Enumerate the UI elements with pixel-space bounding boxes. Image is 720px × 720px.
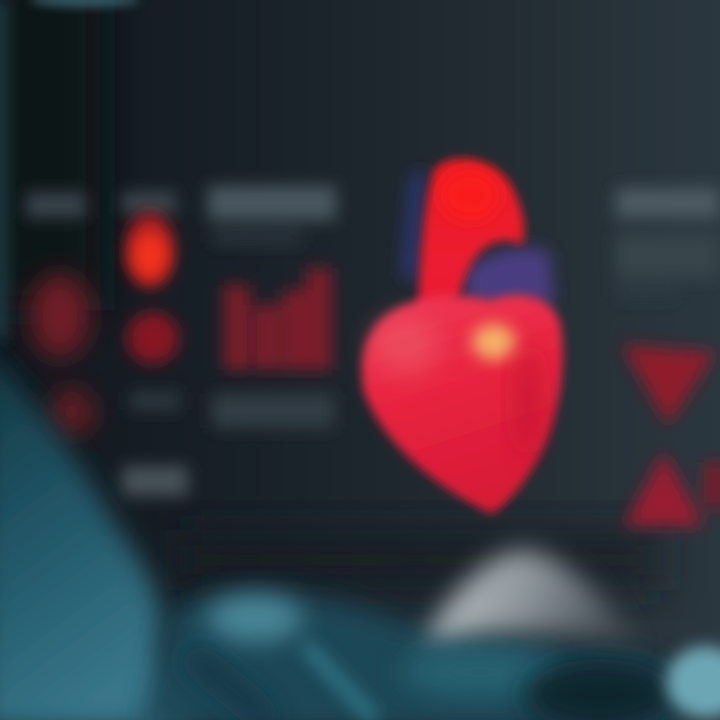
illustration: anatomical heart <box>362 159 563 514</box>
heart body <box>362 295 563 514</box>
text block: lower left labels <box>122 392 334 496</box>
aorta <box>418 159 524 325</box>
foreground: teal figure shoulder <box>0 345 680 720</box>
panel: left column headings <box>26 186 336 244</box>
icon: right red triangles <box>622 345 720 526</box>
icon: left red markers <box>30 274 94 436</box>
vessels: purple veins <box>400 170 554 306</box>
shade right <box>514 345 542 455</box>
glow centre <box>472 324 516 360</box>
highlight aorta <box>440 169 500 221</box>
icon: small glowing heart <box>126 212 179 364</box>
panel: right column text <box>616 188 720 298</box>
foreground: bottom right teal highlight <box>666 646 720 718</box>
foreground: grey head shape <box>400 550 675 720</box>
highlight left <box>371 315 439 375</box>
chart: red bars <box>224 268 332 370</box>
